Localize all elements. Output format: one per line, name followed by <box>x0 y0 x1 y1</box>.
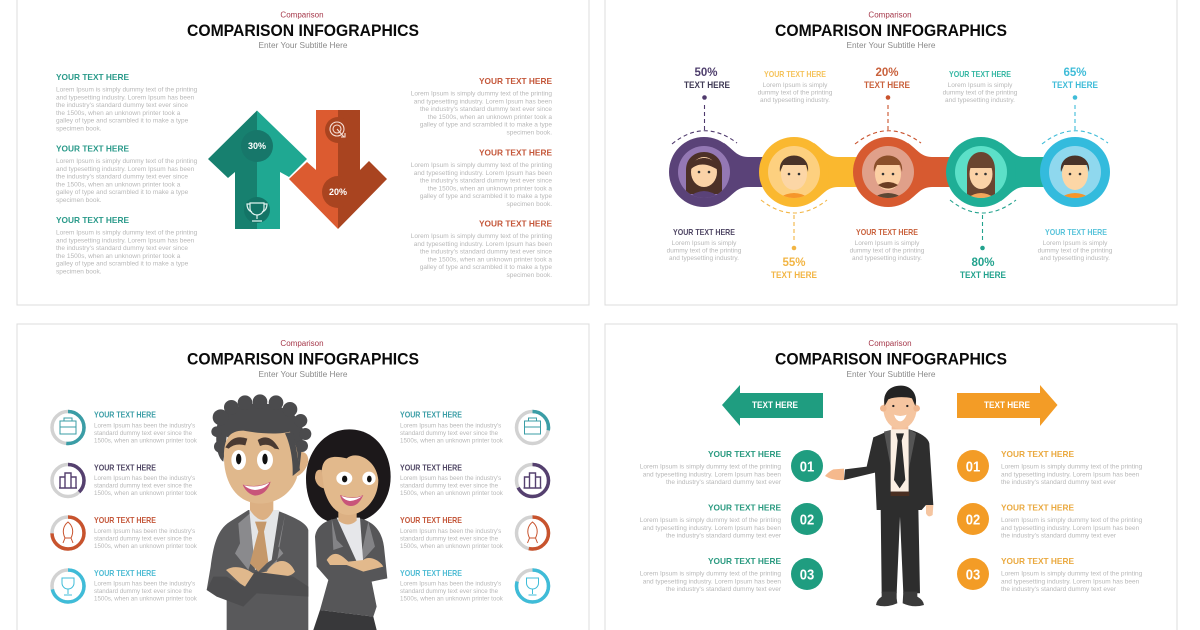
ring icon: rocket right <box>516 517 548 549</box>
right text block 1: and typesetting industry. Lorem Ipsum has been <box>414 98 552 105</box>
left text 2: standard dummy text ever since the <box>94 482 193 490</box>
badge: orange 03 <box>957 558 989 590</box>
right text 4: YOUR TEXT HERE <box>400 568 462 578</box>
right text 3: Lorem Ipsum has been the industry's <box>400 528 501 535</box>
right text block 3: the 1500s, when an unknown printer took a <box>428 256 552 263</box>
right text 3 <box>400 515 504 550</box>
right text 2: Lorem Ipsum is simply dummy text of the printing <box>1001 517 1143 524</box>
badge: orange 01 <box>957 450 989 482</box>
right text block 2: the 1500s, when an unknown printer took a <box>428 185 552 192</box>
right text 3: YOUR TEXT HERE <box>1001 556 1074 566</box>
callout: 55%: TEXT HERE <box>771 270 817 280</box>
left text 2: and typesetting industry. Lorem Ipsum has been <box>643 525 781 532</box>
illustration: businessman <box>207 394 311 630</box>
right text block 3: and typesetting industry. Lorem Ipsum has been <box>414 241 552 248</box>
panel: man with two options slide <box>605 324 1177 630</box>
right text 1: YOUR TEXT HERE <box>1001 449 1074 459</box>
right text 2: 1500s, when an unknown printer took <box>400 490 504 497</box>
left text 2: YOUR TEXT HERE <box>94 462 156 472</box>
callout: 20% <box>855 67 921 144</box>
callout: 50%: TEXT HERE <box>684 80 730 90</box>
left text 1: the industry's standard dummy text ever <box>666 479 782 486</box>
left text 3 <box>640 556 782 593</box>
node: green <box>946 137 1047 207</box>
text: orange bottom <box>850 227 925 262</box>
right text block 1: galley of type and scrambled it to make a type <box>420 122 552 129</box>
left text block 2: specimen book. <box>56 197 102 204</box>
text: purple bottom: Lorem Ipsum is simply <box>672 240 737 247</box>
left text 3: Lorem Ipsum has been the industry's <box>94 528 195 535</box>
right text block 3: the industry's standard dummy text ever since <box>420 249 552 256</box>
left text 3: and typesetting industry. Lorem Ipsum has been <box>643 578 781 585</box>
left text 1 <box>640 449 782 486</box>
left text 2: 1500s, when an unknown printer took <box>94 490 198 497</box>
left text block 1 <box>56 72 198 132</box>
left text block 3 <box>56 215 198 276</box>
left text 4: YOUR TEXT HERE <box>94 568 156 578</box>
arrow: orange right <box>957 385 1058 426</box>
right text 4: standard dummy text ever since the <box>400 588 499 595</box>
left text 1: 1500s, when an unknown printer took <box>94 438 198 444</box>
left text block 2: and typesetting industry. Lorem Ipsum has been <box>56 166 195 173</box>
ring icon: briefcase right <box>516 412 548 444</box>
text: purple bottom: and typesetting industry. <box>669 255 739 262</box>
arrow: green left: TEXT HERE <box>752 400 798 410</box>
text: green top: YOUR TEXT HERE <box>949 69 1011 79</box>
left text 4: standard dummy text ever since the <box>94 588 193 595</box>
right text 2: Lorem Ipsum has been the industry's <box>400 475 501 482</box>
right text 3: YOUR TEXT HERE <box>400 515 462 525</box>
right text 3: standard dummy text ever since the <box>400 536 499 542</box>
left text 1 <box>94 410 198 444</box>
left text 3: the industry's standard dummy text ever <box>666 586 782 593</box>
badge: green 03: 03 <box>800 566 814 584</box>
right text block 2: galley of type and scrambled it to make a type <box>420 193 552 200</box>
right text 2 <box>1001 502 1143 540</box>
left text 1: standard dummy text ever since the <box>94 430 193 437</box>
ring icon: briefcase left <box>52 412 84 444</box>
illustration: standing man <box>825 386 933 606</box>
right text block 1: Lorem Ipsum is simply dummy text of the printing <box>411 90 552 98</box>
callout: 65%: TEXT HERE <box>1052 80 1098 90</box>
left text block 3: the 1500s, when an unknown printer took a <box>56 253 181 260</box>
callout: 80%: 80% <box>971 257 995 269</box>
right text 1: the industry's standard dummy text ever <box>1001 479 1117 486</box>
subtitle: Enter Your Subtitle Here <box>846 40 936 50</box>
left text block 3: and typesetting industry. Lorem Ipsum has been <box>56 237 195 244</box>
right text 1: standard dummy text ever since the <box>400 430 499 437</box>
node: yellow <box>759 137 860 207</box>
subtitle: Enter Your Subtitle Here <box>258 369 348 379</box>
badge: orange 02: 02 <box>966 512 980 528</box>
subtitle: Enter Your Subtitle Here <box>846 369 936 379</box>
text: green top: and typesetting industry. <box>945 97 1015 104</box>
badge: orange 03: 03 <box>966 566 980 584</box>
left text 4: Lorem Ipsum has been the industry's <box>94 580 195 588</box>
icon: trophy <box>247 203 267 221</box>
node: blue <box>1040 137 1110 207</box>
subtitle: Enter Your Subtitle Here <box>258 40 348 50</box>
left text block 2: Lorem Ipsum is simply dummy text of the printing <box>56 158 198 165</box>
callout: 80%: TEXT HERE <box>960 270 1006 280</box>
right text block 2: Lorem Ipsum is simply dummy text of the printing <box>411 162 552 169</box>
right text 1: YOUR TEXT HERE <box>400 410 462 420</box>
arrow: red down 20% <box>289 110 387 229</box>
left text 2: YOUR TEXT HERE <box>708 502 781 512</box>
left text block 2: galley of type and scrambled it to make a type <box>56 189 189 196</box>
badge: green 03 <box>791 558 823 590</box>
left text block 1: the industry's standard dummy text ever since <box>56 102 188 109</box>
right text block 3 <box>411 218 552 279</box>
left text 2 <box>640 502 782 540</box>
ring icon: trophy right <box>516 570 548 602</box>
text: blue bottom: and typesetting industry. <box>1040 255 1110 262</box>
text: blue bottom: dummy text of the printing <box>1038 247 1113 254</box>
text: purple bottom <box>667 227 742 262</box>
text: orange bottom: YOUR TEXT HERE <box>856 227 918 237</box>
right text block 2 <box>411 148 552 208</box>
right text block 1: YOUR TEXT HERE <box>479 76 552 86</box>
arrow: green left <box>722 385 823 426</box>
callout: 55% <box>761 200 827 280</box>
left text 2: the industry's standard dummy text ever <box>666 533 782 540</box>
arrow: green up 30%: 30% <box>248 141 266 151</box>
left text block 3: YOUR TEXT HERE <box>56 215 129 225</box>
right text 1 <box>400 410 504 444</box>
right text 3 <box>1001 556 1143 593</box>
text: blue bottom <box>1038 227 1113 262</box>
right text block 3: YOUR TEXT HERE <box>479 218 552 228</box>
curly hair <box>211 394 311 477</box>
eyebrow: Comparison <box>868 10 912 20</box>
right text block 1: the industry's standard dummy text ever since <box>420 106 552 113</box>
right text block 2: and typesetting industry. Lorem Ipsum has been <box>414 170 552 177</box>
right text 3: the industry's standard dummy text ever <box>1001 586 1117 593</box>
icon: target <box>330 122 345 137</box>
text: green top: dummy text of the printing <box>943 89 1018 96</box>
right text 4 <box>400 568 504 602</box>
left text block 1: specimen book. <box>56 126 102 132</box>
right text 1 <box>1001 449 1143 486</box>
right text 3: Lorem Ipsum is simply dummy text of the printing <box>1001 570 1143 578</box>
left text block 1: galley of type and scrambled it to make a type <box>56 118 189 125</box>
ring icon: buildings right <box>516 464 548 496</box>
left text 1: YOUR TEXT HERE <box>94 410 156 420</box>
left text block 2: YOUR TEXT HERE <box>56 144 129 154</box>
illustration: businesswoman <box>306 429 391 630</box>
left text block 1: the 1500s, when an unknown printer took a <box>56 110 181 117</box>
text: green top: Lorem Ipsum is simply <box>948 82 1013 89</box>
right text 1: Lorem Ipsum has been the industry's <box>400 422 501 430</box>
avatar chain <box>669 137 1110 207</box>
right text block 2: the industry's standard dummy text ever since <box>420 178 552 185</box>
left text 3: 1500s, when an unknown printer took <box>94 543 198 550</box>
left text 3: Lorem Ipsum is simply dummy text of the printing <box>640 570 781 578</box>
left text 3 <box>94 515 198 550</box>
left text block 3: galley of type and scrambled it to make a type <box>56 261 189 268</box>
callout: 80% <box>950 200 1016 280</box>
ring icon: trophy left <box>52 570 84 602</box>
callout: 20%: 20% <box>875 67 899 79</box>
text: orange bottom: and typesetting industry. <box>852 255 922 262</box>
left text 3: YOUR TEXT HERE <box>708 556 781 566</box>
badge: green 02: 02 <box>800 512 814 528</box>
arrow: orange right: TEXT HERE <box>984 400 1030 410</box>
right text block 1: the 1500s, when an unknown printer took a <box>428 114 552 121</box>
left text block 2 <box>56 144 198 204</box>
node: orange <box>853 137 953 207</box>
right text 2 <box>400 462 504 497</box>
text: yellow top <box>758 69 833 104</box>
right text block 3: specimen book. <box>506 272 552 279</box>
right text block 1: specimen book. <box>506 130 552 136</box>
text: purple bottom: YOUR TEXT HERE <box>673 227 735 237</box>
right text 2: YOUR TEXT HERE <box>1001 502 1074 512</box>
left text 4: 1500s, when an unknown printer took <box>94 596 198 602</box>
left text 3: standard dummy text ever since the <box>94 536 193 542</box>
right text block 1 <box>411 76 552 136</box>
ring icon: buildings left <box>52 464 84 496</box>
text: orange bottom: dummy text of the printing <box>850 247 925 254</box>
right text block 2: specimen book. <box>506 201 552 208</box>
title: COMPARISON INFOGRAPHICS <box>775 21 1007 40</box>
left text block 3: Lorem Ipsum is simply dummy text of the printing <box>56 230 198 236</box>
arrow: green up 30% <box>208 110 307 229</box>
title: COMPARISON INFOGRAPHICS <box>187 350 419 368</box>
right text block 3: Lorem Ipsum is simply dummy text of the printing <box>411 233 552 240</box>
text: orange bottom: Lorem Ipsum is simply <box>855 240 920 247</box>
panel: business couple slide <box>17 324 589 630</box>
right text block 3: galley of type and scrambled it to make a type <box>420 264 552 271</box>
text: yellow top: Lorem Ipsum is simply <box>763 82 828 89</box>
left text 2: Lorem Ipsum has been the industry's <box>94 475 195 482</box>
text: green top <box>943 69 1018 104</box>
left text 1: YOUR TEXT HERE <box>708 449 781 459</box>
right text block 2: YOUR TEXT HERE <box>479 148 552 158</box>
right text 3: 1500s, when an unknown printer took <box>400 543 504 550</box>
badge: orange 01: 01 <box>966 458 980 476</box>
left text 2: Lorem Ipsum is simply dummy text of the printing <box>640 517 781 524</box>
text: blue bottom: Lorem Ipsum is simply <box>1043 240 1108 247</box>
node: purple <box>669 137 765 207</box>
badge: green 01: 01 <box>800 458 814 476</box>
left text 1: Lorem Ipsum has been the industry's <box>94 422 195 430</box>
right text 1: 1500s, when an unknown printer took <box>400 438 504 444</box>
arrow: red down 20%: 20% <box>329 187 347 197</box>
left text block 3: specimen book. <box>56 268 102 276</box>
callout: 65% <box>1042 67 1108 144</box>
right text 2: the industry's standard dummy text ever <box>1001 533 1117 540</box>
right text 2: and typesetting industry. Lorem Ipsum has been <box>1001 525 1140 532</box>
text: blue bottom: YOUR TEXT HERE <box>1045 227 1107 237</box>
eyebrow: Comparison <box>280 339 324 348</box>
left text 4 <box>94 568 198 602</box>
callout: 65%: 65% <box>1063 67 1087 79</box>
left text 3: YOUR TEXT HERE <box>94 515 156 525</box>
text: yellow top: YOUR TEXT HERE <box>764 69 826 79</box>
left text block 2: the 1500s, when an unknown printer took a <box>56 181 181 188</box>
panel: up and down arrows slide <box>17 0 589 305</box>
left text 1: Lorem Ipsum is simply dummy text of the printing <box>640 464 781 470</box>
right text 2: YOUR TEXT HERE <box>400 462 462 472</box>
title: COMPARISON INFOGRAPHICS <box>775 350 1007 368</box>
panel: five avatars slide <box>605 0 1177 305</box>
callout: 55%: 55% <box>782 257 806 269</box>
badge: orange 02 <box>957 503 989 535</box>
left text block 3: the industry's standard dummy text ever since <box>56 245 188 252</box>
badge: green 02 <box>791 503 823 535</box>
text: yellow top: dummy text of the printing <box>758 89 833 96</box>
left text 1: and typesetting industry. Lorem Ipsum has been <box>643 471 781 478</box>
right text 1: Lorem Ipsum is simply dummy text of the printing <box>1001 464 1143 470</box>
left text block 2: the industry's standard dummy text ever since <box>56 174 188 181</box>
text: purple bottom: dummy text of the printing <box>667 247 742 254</box>
right text 2: standard dummy text ever since the <box>400 482 499 490</box>
title: COMPARISON INFOGRAPHICS <box>187 21 419 40</box>
left text block 1: YOUR TEXT HERE <box>56 72 129 82</box>
left text block 1: and typesetting industry. Lorem Ipsum has been <box>56 94 195 101</box>
right text 1: and typesetting industry. Lorem Ipsum has been <box>1001 471 1140 478</box>
eyebrow: Comparison <box>280 10 324 20</box>
right text 4: Lorem Ipsum has been the industry's <box>400 580 501 588</box>
callout: 50% <box>672 67 737 144</box>
right text 4: 1500s, when an unknown printer took <box>400 596 504 602</box>
callout: 50%: 50% <box>694 67 718 79</box>
ring icon: rocket left <box>52 517 84 549</box>
left text 2 <box>94 462 198 497</box>
callout: 20%: TEXT HERE <box>864 80 910 90</box>
eyebrow: Comparison <box>868 339 912 348</box>
badge: green 01 <box>791 450 823 482</box>
text: yellow top: and typesetting industry. <box>760 97 830 104</box>
right text 3: and typesetting industry. Lorem Ipsum has been <box>1001 578 1140 585</box>
left text block 1: Lorem Ipsum is simply dummy text of the printing <box>56 86 198 94</box>
